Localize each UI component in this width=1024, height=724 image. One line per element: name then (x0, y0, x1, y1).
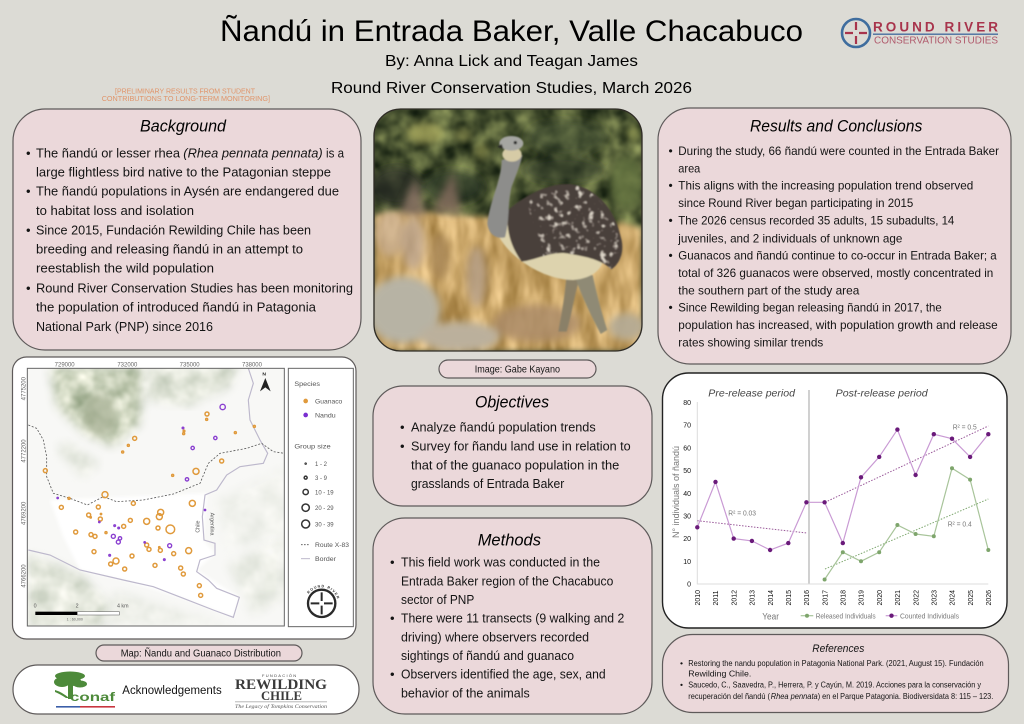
heading: methods: Methods (478, 532, 541, 550)
map legend (288, 368, 354, 628)
text block: background bullets: National Park (PNP) since 2016 (36, 319, 213, 334)
text block: background bullets: • (26, 145, 31, 160)
chart legend (801, 613, 959, 620)
period headings: Post-release period (836, 388, 929, 400)
text block: background bullets: Since 2015, Fundación Rewilding Chile has been (36, 222, 311, 237)
chart axes: 2016 (804, 590, 811, 606)
text block: objectives bullets: grasslands of Entrada Baker (411, 476, 565, 491)
map legend: Species (294, 381, 320, 388)
caption: map title (96, 645, 302, 661)
text block: methods bullets: There were 11 transects (9 walking and 2 (401, 611, 624, 626)
text block: background bullets: Round River Conservation Studies has been monitoring (36, 280, 353, 295)
map legend: Border (315, 557, 336, 563)
text block: results bullets: juveniles, and 2 individuals of unknown age (677, 231, 903, 245)
chart axes: 2013 (750, 590, 757, 606)
logo: Fundación Rewilding Chile: FUNDACIÓN (262, 673, 297, 678)
logo: Round River Conservation Studies (842, 19, 998, 47)
text block: references list: Rhea pennata (771, 691, 818, 701)
R-squared labels (728, 424, 977, 529)
chart axes: 2019 (859, 590, 866, 606)
chart axes: 60 (683, 445, 691, 452)
text block: results bullets: • (668, 301, 673, 315)
scale bar: 2 (76, 604, 79, 610)
text block: methods bullets: Entrada Baker region of the Chacabuco (401, 573, 613, 588)
panel: results and conclusions (658, 108, 1011, 364)
heading: results and conclusions: Results and Conclusions (750, 118, 922, 136)
chart axes: 50 (683, 468, 691, 475)
chart axes: 2014 (768, 590, 775, 606)
north arrow (260, 372, 271, 391)
text block: results bullets: Since Rewilding began releasing ñandú in 2017, the (678, 301, 942, 315)
logo: Fundación Rewilding Chile (235, 673, 328, 710)
text block: results bullets: The 2026 census recorded 35 adults, 15 subadults, 14 (678, 214, 955, 228)
R-squared labels: R² = 0.4 (948, 522, 972, 529)
map legend: Nandu (315, 413, 336, 419)
chart axes: 2012 (731, 590, 738, 606)
series: counted individuals (695, 427, 990, 552)
text block: results bullets: During the study, 66 ñandú were counted in the Entrada Baker (678, 144, 999, 158)
map frame with terrain (27, 367, 287, 628)
heading: references: References (812, 643, 865, 655)
text block: results bullets: rates showing similar trends (678, 335, 823, 349)
chart axes: 2018 (840, 590, 848, 606)
logo: Round River Conservation Studies: ROUND RIVER (873, 20, 998, 34)
scale bar: 0 (34, 604, 37, 610)
text block: background bullets: (Rhea pennata pennata) (183, 145, 323, 160)
text block: references list (680, 658, 993, 701)
text block: results bullets: area (678, 161, 701, 175)
panel: background (13, 109, 361, 350)
coordinate labels: 4766200 (22, 564, 28, 588)
logo: Fundación Rewilding Chile: REWILDING (235, 677, 327, 693)
ñandu group markers (57, 404, 225, 560)
border line (28, 368, 268, 617)
map legend: 1 - 2 (315, 462, 328, 468)
text block: objectives bullets: • (400, 420, 405, 435)
heading: background: Background (140, 118, 227, 136)
caption: image credit (439, 360, 596, 378)
photo: ñandú in grassland (367, 109, 645, 352)
scale bar (34, 604, 129, 621)
text block: references list: Saucedo, C., Saavedra, P., Herrera, P. y Cayún, M. 2019. Acciones para la conservación y (688, 680, 982, 690)
authors: By: Anna Lick and Teagan James (385, 53, 638, 70)
chart axes: 80 (683, 400, 691, 407)
preliminary results note: CONTRIBUTIONS TO LONG-TERM MONITORING] (102, 94, 270, 103)
logo: CONAF: conaf (70, 692, 115, 704)
text block: background bullets: is a (326, 145, 345, 160)
preliminary results note: [PRELIMINARY RESULTS FROM STUDENT (115, 86, 255, 95)
text block: results bullets: This aligns with the increasing population trend observed (678, 179, 973, 193)
chart axes: 2015 (786, 590, 793, 606)
coordinate labels: 729000 (55, 363, 75, 369)
text block: results bullets: Guanacos and ñandú continue to co-occur in Entrada Baker; a (678, 249, 997, 263)
panel: references (662, 634, 1008, 712)
R-squared labels: R² = 0.5 (953, 424, 977, 431)
logo: Round River Conservation Studies: CONSERVATION STUDIES (874, 35, 998, 47)
text block: methods bullets: • (390, 555, 395, 570)
text block: methods bullets: behavior of the animals (401, 685, 530, 700)
text block: results bullets: • (668, 179, 673, 193)
text block: background bullets: The ñandú populations in Aysén are endangered due (36, 184, 339, 199)
text block: references list: recuperación del ñandú ( (688, 691, 770, 701)
text block: references list: Restoring the nandu population in Patagonia National Park. (2021, August 15). Fundación (688, 658, 984, 668)
chart axes: 2022 (913, 590, 920, 606)
chart axes: 70 (683, 423, 691, 430)
chart legend: Counted Individuals (900, 613, 959, 620)
chart axes: 2025 (968, 590, 975, 606)
text block: objectives bullets: Analyze ñandú population trends (411, 420, 596, 435)
heading: objectives: Objectives (475, 394, 549, 412)
text block: objectives bullets (400, 420, 631, 491)
text block: results bullets: • (668, 144, 673, 158)
map labels: Chile and Argentina: Chile (195, 520, 201, 533)
text block: background bullets (26, 145, 353, 334)
text block: background bullets: the population of introduced ñandú in Patagonia (36, 300, 317, 315)
chart axes (671, 400, 993, 621)
coordinate labels (22, 363, 263, 588)
text block: references list: • (680, 680, 683, 690)
map legend: 3 - 9 (315, 476, 328, 482)
text block: references list: • (680, 658, 683, 668)
panel: methods (373, 518, 652, 714)
logo: Fundación Rewilding Chile: CHILE (261, 689, 302, 703)
text block: background bullets: reestablish the wild population (36, 261, 214, 276)
panel: objectives (373, 386, 652, 506)
text block: references list: Rewilding Chile. (688, 669, 751, 679)
R-squared labels: R² = 0.03 (728, 510, 756, 517)
chart axes: 2011 (713, 590, 720, 606)
period divider (808, 390, 810, 584)
acknowledgements label: Acknowledgements (122, 685, 222, 697)
coordinate labels: 735000 (180, 363, 200, 369)
chart axes: 2023 (932, 590, 938, 606)
text block: methods bullets: sightings of ñandú and guanaco (401, 648, 574, 663)
coordinate labels: 732000 (117, 363, 138, 369)
panel: distribution map (12, 346, 396, 640)
chart axes: 2024 (950, 590, 957, 606)
text block: background bullets: to habitat loss and isolation (36, 203, 194, 218)
period headings (708, 388, 929, 400)
route X-83 (28, 425, 284, 505)
guanaco group markers (43, 412, 255, 597)
chart axes: 2020 (877, 590, 884, 606)
text block: objectives bullets: • (400, 439, 405, 454)
text block: objectives bullets: Survey for ñandu land use in relation to (411, 439, 631, 454)
chart axes: 2017 (822, 590, 829, 606)
chart axes: 30 (683, 514, 691, 520)
map legend: Guanaco (315, 399, 343, 405)
text block: results bullets: total of 326 guanacos were observed, mostly concentrated in (678, 266, 993, 280)
map labels: Chile and Argentina: Argentina (209, 513, 215, 536)
map legend: Route X-83 (315, 543, 350, 549)
preliminary results note (102, 86, 270, 103)
map legend: 10 - 19 (315, 490, 334, 496)
chart axes: 2026 (986, 590, 993, 606)
text block: background bullets: The ñandú or lesser rhea (36, 145, 181, 160)
scale bar: 4 km (117, 604, 129, 610)
text block: results bullets: • (668, 249, 673, 263)
coordinate labels: 4772200 (22, 439, 28, 463)
text block: results bullets: population has increased, with population growth and release (678, 318, 998, 332)
north arrow: N (262, 372, 266, 378)
coordinate labels: 4769200 (22, 501, 28, 525)
coordinate labels: 738000 (242, 363, 263, 369)
coordinate labels: 4775200 (22, 376, 28, 400)
chart axes: Year (762, 611, 779, 621)
map legend: 30 - 39 (315, 522, 334, 528)
text block: methods bullets: • (390, 667, 395, 682)
text block: results bullets: the southern part of the study area (678, 283, 860, 297)
text block: results bullets: since Round River began participating in 2015 (678, 196, 914, 210)
series: released individuals (823, 466, 990, 582)
title: Ñandú in Entrada Baker, Valle Chacabuco (220, 14, 803, 48)
text block: background bullets: • (26, 280, 31, 295)
panel: population trend chart (662, 373, 1007, 628)
logo: Fundación Rewilding Chile: The Legacy of Tompkins Conservation (235, 705, 328, 710)
chart axes: 10 (683, 559, 691, 566)
text block: results bullets: • (668, 214, 673, 228)
text block: objectives bullets: that of the guanaco population in the (411, 457, 619, 472)
chart axes: 2021 (895, 590, 902, 606)
text block: background bullets: • (26, 184, 31, 199)
chart axes: 40 (683, 491, 691, 498)
text block: methods bullets (390, 555, 624, 700)
caption: image credit: Image: Gabe Kayano (475, 364, 560, 376)
text block: references list: ) en el Parque Patagonia. Biodiversidata 8: 115 – 123. (818, 691, 993, 701)
chart legend: Released Individuals (816, 613, 876, 620)
chart axes: 0 (687, 582, 691, 589)
chart axes: N° individuals of ñandú (671, 446, 681, 538)
period headings: Pre-release period (708, 388, 796, 400)
text block: methods bullets: This field work was conducted in the (401, 555, 600, 570)
logo: CONAF (54, 672, 115, 708)
caption: map title: Map: Ñandu and Guanaco Distribution (121, 647, 281, 660)
text block: methods bullets: Observers identified the age, sex, and (401, 667, 606, 682)
map legend: ROUND RIVER (307, 584, 340, 599)
scale bar: 1 : 60,000 (67, 617, 83, 621)
text block: results bullets (668, 144, 999, 349)
map legend: 20 - 29 (315, 506, 334, 512)
text block: methods bullets: • (390, 611, 395, 626)
map labels: Chile and Argentina (195, 513, 215, 536)
text block: background bullets: • (26, 222, 31, 237)
trend lines (697, 426, 988, 569)
organisation and date: Round River Conservation Studies, March 2026 (331, 80, 692, 97)
chart axes: 20 (683, 536, 691, 543)
map legend: Group size (294, 444, 331, 451)
text block: methods bullets: sector of PNP (401, 592, 474, 607)
text block: background bullets: breeding and releasing ñandú in an attempt to (36, 242, 303, 257)
chart axes: 2010 (695, 590, 702, 606)
text block: background bullets: large flightless bird native to the Patagonian steppe (36, 164, 331, 179)
text block: methods bullets: driving) where observers recorded (401, 629, 589, 644)
panel: acknowledgements (13, 665, 359, 714)
